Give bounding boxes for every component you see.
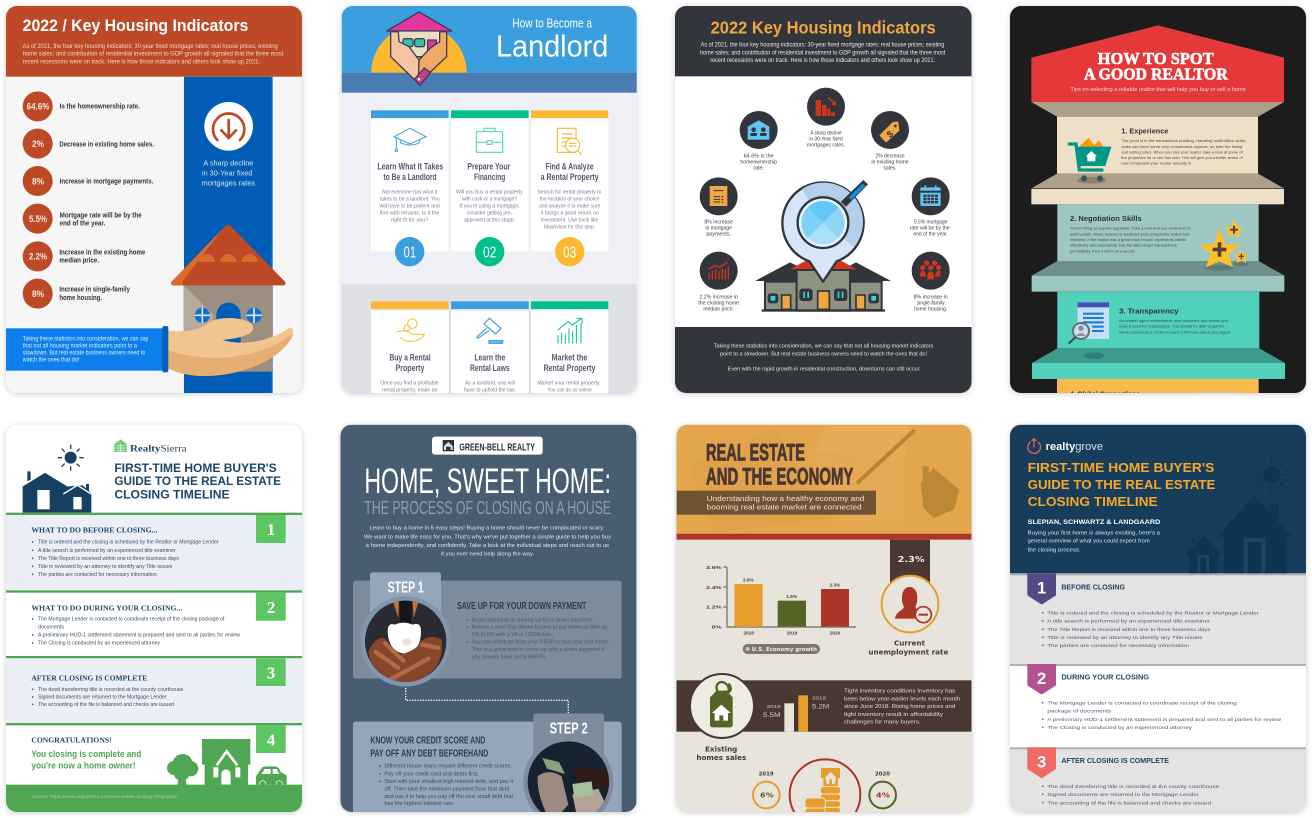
panel: step 1: 3% to 0% with a VA or USDA loan. bbox=[472, 632, 553, 638]
captions: 5.5% mortgage bbox=[914, 220, 947, 226]
section 3: after closing bbox=[1010, 747, 1306, 806]
section 1: before closing: The Title Report is received within one to three business days bbox=[38, 556, 179, 562]
panel: steps 04 to 06: Rental Property bbox=[544, 363, 595, 373]
text: introduction bbox=[364, 526, 611, 558]
section 1: before closing: 1 bbox=[267, 520, 275, 539]
text: introduction: if you ever need help along the way. bbox=[441, 552, 534, 558]
section 4: congratulations: you're now a home owner! bbox=[31, 761, 136, 771]
stat list: home housing. bbox=[59, 295, 102, 302]
panel: existing home sales: 5.5M bbox=[763, 712, 781, 719]
bar chart: U.S. economy growth: U.S. Economy growth bbox=[752, 647, 817, 653]
bar chart: U.S. economy growth: 2020 bbox=[830, 631, 841, 636]
section 2: during closing: The Mortgage Lender is contacted to coordinate receipt of the closing bbox=[1047, 700, 1237, 706]
section 4: congratulations bbox=[6, 723, 302, 787]
panel: steps 01 to 03: with cash or a mortgage? bbox=[462, 196, 517, 202]
panel: existing home sales: challenges for many buyers. bbox=[844, 720, 921, 726]
panel: step 1: Begin planning on saving up for a down payment. bbox=[472, 617, 593, 623]
icon: growth chart bbox=[558, 318, 582, 343]
stat: unemployment rate: unemployment rate bbox=[868, 648, 949, 656]
panel: steps 01 to 03: Find & Analyze bbox=[546, 161, 594, 171]
header: photo banner with title: booming real estate market are connected bbox=[707, 505, 862, 512]
header: dark title block: recent recessions were on track. Here is how those indicators and others look show up 2021: bbox=[710, 58, 935, 64]
bar chart: U.S. economy growth: 0% bbox=[712, 625, 723, 630]
bar chart: U.S. economy growth: 2.3% bbox=[830, 583, 841, 588]
section 1: before closing: Title is ordered and the closing is scheduled by the Realtor or Mortgage Lender bbox=[38, 540, 219, 546]
icon: falling bars bbox=[816, 97, 836, 116]
panel: existing home sales: since June 2018. Rising home prices and bbox=[844, 704, 955, 710]
section 3: after closing: 3 bbox=[1037, 752, 1046, 771]
text: introduction: a home independently, and confidently. Take a look at the individual steps and reach out to us bbox=[366, 543, 609, 549]
header: red title block bbox=[6, 6, 302, 77]
footer: dark closing block: point to a slowdown. But real estate business owners need to watch the ones that do! bbox=[720, 351, 927, 357]
icon: line chart bbox=[709, 262, 728, 279]
panel: 1. Experience bbox=[1031, 117, 1284, 204]
logo: realtygrove: realtygrove bbox=[1046, 441, 1103, 453]
text: sharp decline callout: mortgages rates bbox=[202, 178, 255, 187]
icon: sun and house bbox=[20, 445, 94, 513]
icon: shopping cart with house bbox=[1069, 138, 1111, 184]
panel: steps 01 to 03: 01 bbox=[404, 244, 416, 261]
panel: step 1: Borrow a loan that allows buyers to put down as little as bbox=[472, 625, 608, 631]
panel: steps 01 to 03: Search for rental property in bbox=[537, 189, 601, 195]
header: dark title block: 2022 Key Housing Indicators bbox=[711, 17, 936, 37]
footer: dark closing block bbox=[675, 327, 972, 394]
section 1: before closing bbox=[1010, 573, 1306, 649]
illustration: houses under map pin with magnifier bbox=[755, 180, 891, 312]
header: blue banner bbox=[342, 6, 637, 93]
bar chart: U.S. economy growth bbox=[706, 565, 856, 654]
section 4: congratulations: 4 bbox=[267, 730, 276, 749]
panel: step 2: PAY OFF ANY DEBT BEFOREHAND bbox=[370, 748, 488, 759]
header: dark title block: As of 2021, the four key housing indicators: 30-year fixed mortgage rates; real house prices; existing bbox=[701, 43, 944, 49]
panel: steps 01 to 03: Will you buy a rental property bbox=[456, 189, 523, 195]
header: navy title block: FIRST-TIME HOME BUYER'S bbox=[1028, 460, 1215, 475]
panel: 2. Negotiation Skills: 2. Negotiation Skills bbox=[1070, 214, 1142, 223]
section 2: during closing: A preliminary HUD-1 settlement statement is prepared and sent to all parties for review bbox=[38, 633, 240, 639]
captions: 8% increase bbox=[704, 220, 733, 226]
stats: 2019 and 2020 percentages: 2020 bbox=[875, 772, 890, 778]
panel: blue column bbox=[184, 77, 273, 393]
section 2: during closing bbox=[1010, 664, 1306, 747]
title bbox=[114, 461, 281, 501]
panel: steps 01 to 03: Financing bbox=[474, 172, 505, 182]
panel: steps 01 to 03: investment. Use tools like bbox=[541, 217, 598, 223]
footer: dark closing block: Even with the rapid growth in residential construction, downturns can still occur. bbox=[728, 367, 921, 373]
card: Home, Sweet Home (Green-Bell Realty) bbox=[340, 425, 636, 818]
section 1: before closing: The parties are contacted for necessary information bbox=[1047, 643, 1189, 649]
header: red title block: 2022 / Key Housing Indicators bbox=[23, 16, 248, 35]
panel: step 2: STEP 2 bbox=[550, 720, 588, 737]
icon: coins and house in circle bbox=[790, 759, 860, 818]
icon: stars bbox=[1199, 219, 1249, 271]
panel: existing home sales: been below year-earlier levels each month bbox=[844, 696, 960, 702]
stat list: 2% bbox=[32, 139, 44, 149]
section 2: during closing: A preliminary HUD-1 settlement statement is prepared and sent to all parties for review bbox=[1047, 717, 1281, 723]
section 1: before closing: The Title Report is received within one to three business days bbox=[1047, 627, 1211, 633]
captions: single-family bbox=[917, 301, 945, 307]
stat list: Mortgage rate will be by the bbox=[60, 212, 142, 219]
section 2: during closing: The Closing is conducted by an experienced attorney bbox=[38, 641, 160, 647]
captions bbox=[698, 130, 950, 313]
section 3: after closing: AFTER CLOSING IS COMPLETE bbox=[1061, 758, 1169, 765]
stat list: end of the year. bbox=[60, 220, 105, 227]
logo: Green-Bell Realty bbox=[432, 437, 543, 455]
panel: steps 01 to 03: and analyze it to make sure bbox=[539, 203, 600, 209]
panel: step 1 bbox=[353, 572, 622, 687]
panel: step 1: You can withdraw from your RRSP to buy your first home. bbox=[472, 640, 610, 646]
icon: briefcase bbox=[476, 128, 503, 152]
stat list: Decrease in existing home sales. bbox=[59, 141, 154, 148]
section 2: during closing: WHAT TO DO DURING YOUR CLOSING... bbox=[31, 603, 182, 612]
panel: steps 04 to 06: Learn the bbox=[474, 352, 505, 362]
panel: 1. Experience: the properties he or she has sold. This will give you a better sense of bbox=[1121, 156, 1244, 160]
panel: 2. Negotiation Skills: persistently, then it won't be a secret. bbox=[1070, 249, 1136, 253]
photo: hands holding cash bbox=[523, 737, 613, 818]
bar chart: U.S. economy growth: 1.6% bbox=[786, 594, 798, 599]
panel: step 1: This is a great way to come up with a down payment if bbox=[472, 647, 605, 653]
panel: existing home sales: 5.2M bbox=[812, 703, 829, 710]
title: FIRST-TIME HOME BUYER'S bbox=[114, 461, 277, 475]
title: HOME, SWEET HOME: bbox=[364, 462, 611, 501]
icon: document with magnifier bbox=[557, 128, 582, 155]
panel: step 2 bbox=[353, 713, 622, 818]
card: How to Become a Landlord bbox=[342, 6, 637, 397]
bar chart: U.S. economy growth: 1.2% bbox=[706, 605, 723, 610]
captions: rate. bbox=[753, 166, 764, 172]
panel: step 2: KNOW YOUR CREDIT SCORE AND bbox=[370, 736, 485, 747]
stat list: Increase in single-family bbox=[59, 287, 130, 294]
icon: price tag bbox=[879, 122, 899, 143]
footer: source line: Source: https://www.depianfirm.com/real-estate-closing-infographic bbox=[31, 794, 178, 799]
panel: steps 04 to 06: Once you find a profitable bbox=[380, 380, 439, 386]
icon: calendar bbox=[920, 185, 941, 206]
panel: steps 04 to 06: As a landlord, you will bbox=[465, 380, 515, 386]
section 2: during closing: documents bbox=[38, 625, 64, 631]
section 3: after closing bbox=[6, 656, 302, 723]
panel: 3. Transparency: have a need for reassurance. You should be able to ask for bbox=[1119, 325, 1225, 329]
header: red roof: Tips on selecting a reliable realtor that will help you buy or sell a home bbox=[1070, 87, 1246, 93]
panel: 3. Transparency bbox=[1032, 292, 1285, 379]
panel: steps 04 to 06: Property bbox=[396, 363, 424, 373]
panel: steps 01 to 03: If you're using a mortgage, bbox=[459, 203, 520, 209]
panel: 2. Negotiation Skills: received. If the realtor has a great track record, represents clients bbox=[1070, 238, 1186, 242]
illustration: tree, house and car bbox=[167, 739, 287, 787]
panel: steps 01 to 03: Learn What It Takes bbox=[377, 161, 443, 171]
bar chart: U.S. economy growth: 3.6% bbox=[706, 565, 723, 570]
stat list: 8% bbox=[32, 289, 44, 299]
captions: homeownership bbox=[740, 160, 777, 166]
footer: dark closing block: Taking these statistics into consideration, we can say that not all housing market indicators bbox=[714, 343, 933, 349]
panel: step 2: off. Then take the minimum payment from that debt bbox=[384, 786, 510, 792]
captions: 2% decrease bbox=[875, 154, 905, 160]
captions: in 30-Year fixed bbox=[809, 136, 843, 142]
section 3: after closing: 3 bbox=[267, 663, 275, 682]
panel: steps 01 to 03: firm with tenants. Is it the bbox=[380, 210, 439, 216]
section 1: before closing bbox=[6, 513, 302, 590]
panel: steps 01 to 03: a Rental Property bbox=[541, 172, 599, 182]
text: introduction: Learn to buy a home in 5 easy steps! Buying a home should never be complicated or scary. bbox=[370, 526, 605, 532]
icon: hand with coins bbox=[396, 319, 424, 341]
header: navy title block bbox=[1010, 425, 1306, 573]
panel: 3. Transparency: some references in order to learn a bit more about your agent. bbox=[1119, 330, 1231, 334]
icon: graduation cap bbox=[394, 128, 426, 152]
icon: people group bbox=[920, 260, 941, 279]
panel: steps 04 to 06: Market the bbox=[552, 352, 587, 362]
header: dark title block: home sales; and contribution of residential investment to GDP growth all signaled that the three most bbox=[700, 50, 946, 56]
panel: 3. Transparency: 3. Transparency bbox=[1119, 306, 1180, 315]
panel: step 2: has the highest interest rate. bbox=[384, 801, 454, 807]
panel: existing home sales: Existing bbox=[705, 745, 737, 753]
panel: steps 04 to 06: rental property, make an bbox=[382, 387, 437, 393]
stats: 2019 and 2020 percentages bbox=[753, 772, 896, 808]
captions: in mortgage bbox=[705, 226, 732, 232]
text: introduction: We want to make life easy for you. That's why we've put together a simple guide to help you buy bbox=[364, 534, 611, 540]
section 1: before closing: WHAT TO DO BEFORE CLOSING... bbox=[31, 526, 157, 535]
panel: 2. Negotiation Skills: testimonials, online reviews or feedback your prospective realtor has bbox=[1070, 232, 1189, 236]
panel: steps 04 to 06: Market your rental property. bbox=[537, 380, 601, 386]
captions: home housing. bbox=[914, 307, 947, 313]
header: navy title block: the closing process. bbox=[1028, 547, 1081, 553]
section 2: during closing bbox=[6, 590, 302, 647]
header: navy title block: SLEPIAN, SCHWARTZ & LANDGAARD bbox=[1028, 519, 1161, 526]
bar chart: U.S. economy growth: 2.6% bbox=[743, 578, 754, 583]
section 3: after closing: AFTER CLOSING IS COMPLETE bbox=[31, 674, 147, 683]
panel: 1. Experience: how competent your realtor actually is. bbox=[1121, 162, 1192, 166]
panel: 4. next section, cut off: 4. Global Connections bbox=[1070, 390, 1140, 399]
card: How to Spot a Good Realtor bbox=[1010, 6, 1306, 399]
section 1: before closing: A title search is performed by an experienced title examiner bbox=[1047, 619, 1210, 625]
captions: end of the year. bbox=[913, 232, 948, 238]
card: First-Time Home Buyer's Guide (RealtySierra) bbox=[6, 425, 302, 812]
panel: 1. Experience: and selling sides. When you hire your realtor, take a look at some of bbox=[1121, 151, 1244, 155]
panel: 2. Negotiation Skills: effectively and accurately, has handled major transactions bbox=[1070, 244, 1177, 248]
section 3: after closing: Signed documents are returned to the Mortgage Lender bbox=[1047, 792, 1199, 798]
panel: step 1: STEP 1 bbox=[388, 579, 424, 596]
icon: document bbox=[710, 186, 727, 206]
illustration: house on hand: that not all housing market indicators point to a bbox=[23, 343, 138, 350]
stat list: Is the homeownership rate. bbox=[60, 104, 140, 111]
illustration: house on hand: slowdown. But real estate business owners need to bbox=[23, 350, 146, 357]
title: GUIDE TO THE REAL ESTATE bbox=[114, 474, 281, 488]
panel: steps 01 to 03: 02 bbox=[483, 244, 496, 261]
panel: steps 01 to 03: takes to be a landlord. You bbox=[380, 196, 440, 202]
panel: step 2: Pay off your credit card and debts first. bbox=[384, 771, 479, 777]
logo: RealtySierra: RealtySierra bbox=[130, 445, 188, 455]
panel: 2. Negotiation Skills bbox=[1032, 204, 1284, 292]
panel: existing home sales: 2018 bbox=[767, 704, 781, 710]
panel: 3. Transparency: An honest agent understands your concerns and knows you bbox=[1119, 319, 1228, 323]
icon: checklist with magnifier bbox=[1069, 302, 1109, 359]
panel: 1. Experience: The proof is in the transactions pudding. Handling multimillion dollar bbox=[1121, 139, 1246, 143]
section 1: before closing: 1 bbox=[1037, 579, 1046, 598]
header: navy title block: CLOSING TIMELINE bbox=[1028, 494, 1158, 509]
section 4: congratulations: You closing is complete and bbox=[31, 749, 141, 759]
footer: source line bbox=[6, 785, 302, 812]
illustration: house silhouette and sun bbox=[1185, 457, 1292, 573]
panel: step 2: Different house loans require different credit scores. bbox=[384, 764, 512, 770]
card: 2022 Key Housing Indicators (dark) bbox=[675, 6, 972, 394]
panel: steps 04 to 06: have to uphold the law. bbox=[464, 387, 516, 393]
header: navy title block: GUIDE TO THE REAL ESTATE bbox=[1028, 477, 1216, 492]
captions: rate will be by the bbox=[910, 226, 950, 232]
stat list: 2.2% bbox=[29, 252, 47, 262]
panel: steps 04 to 06: You can do so online bbox=[547, 387, 592, 393]
captions: sales. bbox=[883, 166, 897, 172]
stat: unemployment rate: 2.3% bbox=[898, 554, 925, 564]
panel: steps 01 to 03: the location of your choice bbox=[540, 196, 599, 202]
illustration: house on hand: watch the ones that do! bbox=[22, 357, 80, 364]
title: THE PROCESS OF CLOSING ON A HOUSE bbox=[364, 497, 611, 518]
section 3: after closing: The accounting of the file is balanced and checks are issued bbox=[38, 702, 174, 708]
logo: realtygrove bbox=[1028, 439, 1103, 453]
panel: existing home sales: homes sales bbox=[696, 754, 746, 762]
panel: 1. Experience: 1. Experience bbox=[1121, 126, 1168, 135]
header: photo banner with title: REAL ESTATE bbox=[706, 440, 805, 467]
panel: steps 01 to 03: consider getting pre- bbox=[467, 210, 513, 216]
stat list: Increase in the existing home bbox=[59, 249, 145, 256]
icon: house with people bbox=[748, 120, 769, 140]
panel: steps 01 to 03: 03 bbox=[563, 244, 576, 261]
section 1: before closing: Title is reviewed by an attorney to identify any Title issues bbox=[38, 564, 173, 570]
header: blue banner: Landlord bbox=[496, 30, 608, 64]
section 3: after closing: The accounting of the file is balanced and checks are issued bbox=[1047, 800, 1211, 806]
captions: 8% increase in bbox=[914, 295, 948, 301]
icon: house price tag bbox=[690, 674, 754, 738]
panel: steps 01 to 03 bbox=[371, 110, 608, 266]
captions: 2.2% increase in bbox=[699, 295, 738, 301]
header: photo banner with title: Understanding how a healthy economy and bbox=[707, 496, 864, 503]
panel: existing home sales: 2019 bbox=[812, 696, 826, 702]
panel: steps 01 to 03: right fit for you? bbox=[391, 217, 428, 223]
bar chart: U.S. economy growth: 2.4% bbox=[706, 585, 723, 590]
header: red title block: recent recessions were on track. Here is how those indicators and others look show up 2021: bbox=[23, 59, 260, 66]
panel: existing home sales: Tight inventory conditions Inventory has bbox=[844, 688, 956, 694]
stats: 2019 and 2020 percentages: 6% bbox=[760, 792, 774, 800]
captions: 64.6% is the bbox=[744, 154, 774, 160]
header: dark title block bbox=[675, 6, 972, 76]
stats: 2019 and 2020 percentages: 4% bbox=[876, 792, 890, 800]
text: sharp decline callout bbox=[202, 158, 255, 187]
panel: step 2: and use it to help you pay off the next small debt that bbox=[384, 794, 514, 800]
icon: price tag: $ bbox=[885, 128, 896, 140]
section 4: congratulations: CONGRATULATIONS! bbox=[31, 736, 112, 745]
stat list: 5.5% bbox=[29, 214, 47, 224]
section 2: during closing: package of documents bbox=[1047, 709, 1112, 715]
panel: steps 01 to 03: approved at this stage. bbox=[464, 217, 515, 223]
section 3: after closing: The deed transferring title is recorded at the county courthouse bbox=[1047, 784, 1219, 790]
panel: 1. Experience: sales can have some very complicated aspects, on both the listing bbox=[1121, 145, 1242, 149]
section 2: during closing: 2 bbox=[267, 598, 275, 617]
captions: the existing home bbox=[698, 301, 739, 307]
icon: hands holding house bbox=[371, 12, 467, 85]
header: navy title block: Buying your first home is always exciting, here's a bbox=[1028, 531, 1160, 537]
panel: steps 01 to 03: to Be a Landlord bbox=[383, 172, 437, 182]
panel: step 2: Start with your smallest high interest debt, and pay it bbox=[384, 779, 514, 785]
section 2: during closing: The Closing is conducted by an experienced attorney bbox=[1047, 725, 1193, 731]
panel: existing home sales bbox=[676, 674, 972, 762]
title bbox=[364, 462, 611, 518]
panel: 4. next section, cut off bbox=[1057, 379, 1259, 393]
stat list bbox=[23, 91, 154, 309]
header: red roof: HOW TO SPOT bbox=[1098, 49, 1214, 68]
icon: gavel bbox=[477, 318, 503, 343]
bar chart: U.S. economy growth: 2018 bbox=[743, 631, 754, 636]
stats: 2019 and 2020 percentages: 2019 bbox=[759, 772, 774, 778]
header: navy title block: general overview of what you could expect from bbox=[1028, 538, 1150, 544]
stat: unemployment rate: Current bbox=[894, 639, 926, 647]
photo: hands holding piggy bank bbox=[360, 596, 452, 687]
header: blue banner: How to Become a bbox=[512, 16, 593, 30]
panel: steps 04 to 06: Buy a Rental bbox=[389, 352, 431, 362]
panel: steps 04 to 06: Rental Laws bbox=[470, 363, 510, 373]
bar chart: U.S. economy growth: 2019 bbox=[787, 631, 798, 636]
header: red roof bbox=[1031, 25, 1284, 117]
icon circles bbox=[700, 88, 950, 290]
card: First-Time Home Buyer's Guide (realtygrove) bbox=[1010, 425, 1306, 813]
section 2: during closing: 2 bbox=[1037, 669, 1046, 688]
captions: mortgages rates. bbox=[807, 142, 845, 148]
header: photo banner with title: AND THE ECONOMY bbox=[706, 464, 853, 491]
section 3: after closing: Signed documents are returned to the Mortgage Lender bbox=[38, 695, 167, 701]
captions: median price. bbox=[703, 307, 734, 313]
card: Real Estate and the Economy bbox=[676, 425, 972, 818]
section 2: during closing: DURING YOUR CLOSING bbox=[1061, 675, 1149, 682]
logo: Green-Bell Realty: GREEN-BELL REALTY bbox=[459, 442, 535, 453]
text: sharp decline callout: in 30-Year fixed bbox=[202, 168, 252, 177]
section 1: before closing: The parties are contacted for necessary information bbox=[38, 572, 157, 578]
illustration: house on hand bbox=[6, 225, 293, 376]
panel: steps 01 to 03: Prepare Your bbox=[467, 161, 511, 171]
stat list: 8% bbox=[32, 176, 44, 186]
arrow: dotted connector bbox=[406, 688, 568, 713]
stat list: median price. bbox=[59, 257, 99, 264]
captions: in existing home bbox=[871, 160, 909, 166]
panel: steps 04 to 06 bbox=[371, 301, 608, 397]
panel: steps 01 to 03: Not everyone has what it bbox=[382, 189, 438, 195]
section 2: during closing: The Mortgage Lender is contacted to coordinate receipt of the closing package of bbox=[38, 617, 225, 623]
stat list: Increase in mortgage payments. bbox=[60, 178, 153, 185]
header: red title block: home sales; and contribution of residential investment to GDP growth all signaled that the three most bbox=[23, 51, 284, 58]
text: sharp decline callout: A sharp decline bbox=[203, 158, 253, 167]
panel: 2. Negotiation Skills: You're hiring an expert negotiator. Take a look and see what kind of bbox=[1070, 227, 1191, 231]
panel: steps 01 to 03: will have to be patient and bbox=[380, 203, 440, 209]
stat: unemployment rate bbox=[868, 540, 949, 656]
title: CLOSING TIMELINE bbox=[114, 487, 230, 501]
header: red title block: As of 2021, the four key housing indicators: 30-year fixed mortgage rates; real house prices; existing bbox=[23, 43, 278, 50]
panel: step 1: you already have some RRSPs. bbox=[472, 655, 547, 661]
header: red roof: A GOOD REALTOR bbox=[1084, 64, 1229, 83]
panel: steps 01 to 03: it brings a good return on bbox=[541, 210, 599, 216]
card: 2022 / Key Housing Indicators (red and blue) bbox=[6, 6, 302, 393]
panel: existing home sales: tight inventory result in affordability bbox=[844, 712, 943, 718]
section 1: before closing: Title is ordered and the closing is scheduled by the Realtor or Mortgage Lender bbox=[1047, 610, 1259, 616]
captions: payments. bbox=[706, 232, 731, 238]
icon: down arrow in circle bbox=[204, 102, 253, 151]
captions: A sharp decline bbox=[810, 130, 842, 136]
section 1: before closing: Title is reviewed by an attorney to identify any Title issues bbox=[1047, 635, 1203, 641]
illustration: house on hand: Taking these statistics into consideration, we can say bbox=[23, 335, 149, 342]
section 1: before closing: BEFORE CLOSING bbox=[1061, 584, 1125, 591]
header: photo banner with title bbox=[676, 425, 972, 540]
logo: RealtySierra bbox=[114, 439, 188, 455]
section 3: after closing: The deed transferring title is recorded at the county courthouse bbox=[38, 687, 183, 693]
stat list: 64.6% bbox=[27, 102, 49, 112]
panel: steps 01 to 03: Mashvisor for this step. bbox=[544, 224, 595, 230]
section 1: before closing: A title search is performed by an experienced title examiner bbox=[38, 548, 176, 554]
panel: step 1: SAVE UP FOR YOUR DOWN PAYMENT bbox=[457, 601, 586, 612]
